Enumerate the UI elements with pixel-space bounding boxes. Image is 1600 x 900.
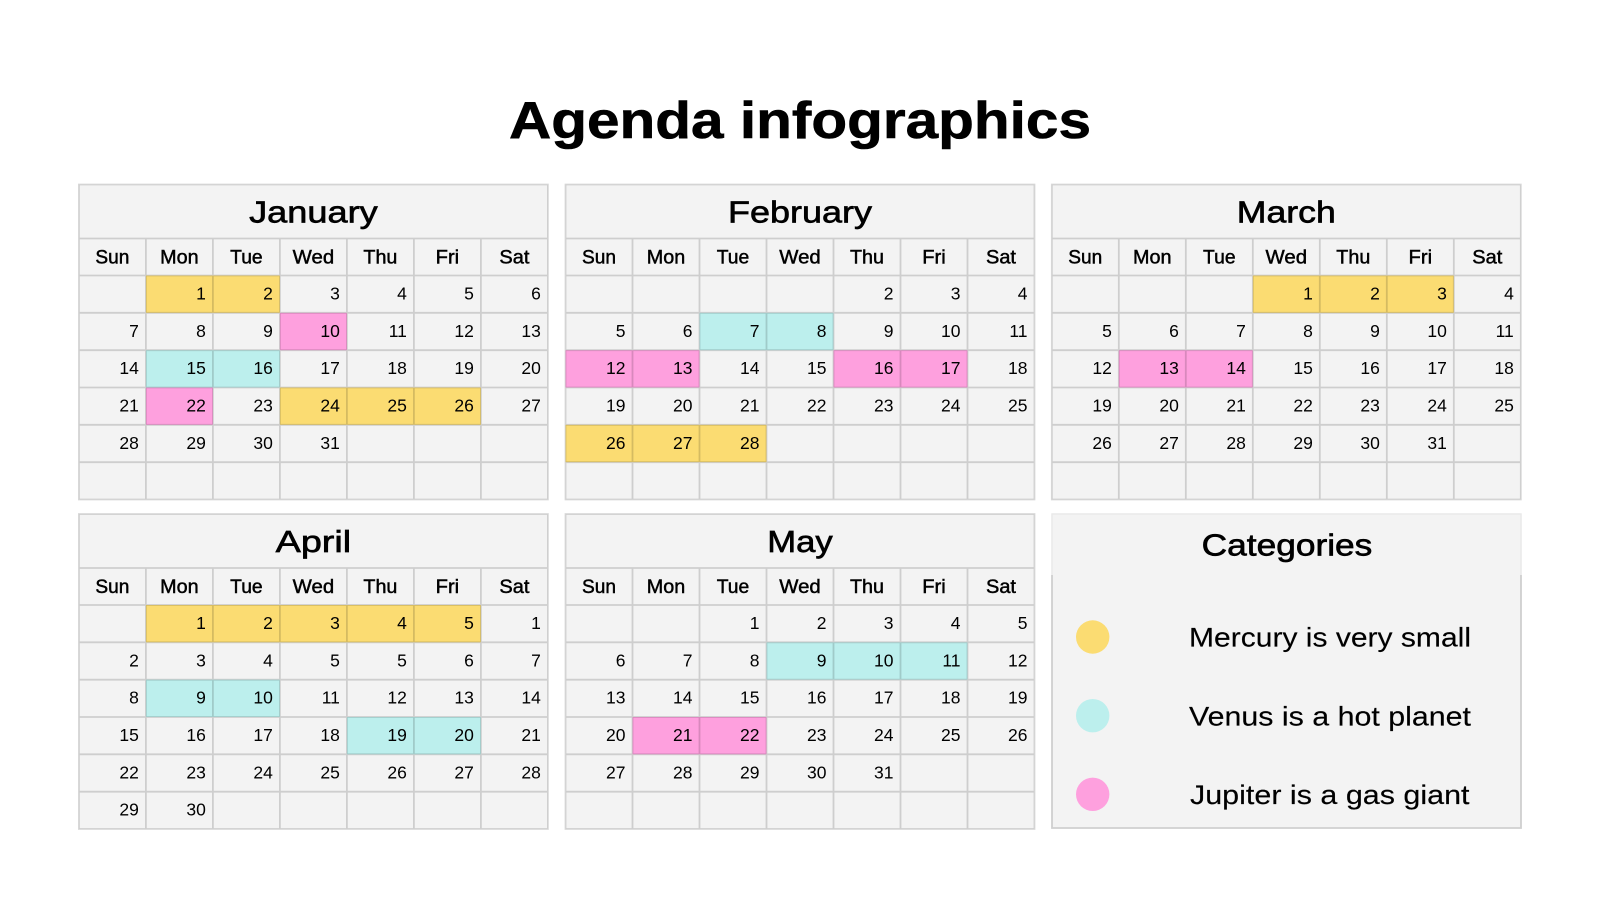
dates: 7 <box>1236 321 1246 341</box>
weekday headers: Sat <box>499 248 530 268</box>
dates: 8 <box>196 321 206 341</box>
weekday headers <box>95 577 530 598</box>
dates: 1 <box>750 613 760 633</box>
dates: 6 <box>464 650 474 670</box>
dates: 9 <box>1370 321 1380 341</box>
dates: 4 <box>1018 284 1028 304</box>
weekday headers: Tue <box>717 577 749 598</box>
dates: 25 <box>320 762 340 782</box>
dates: 5 <box>397 650 407 670</box>
dates: 6 <box>616 650 626 670</box>
weekday headers <box>582 577 1017 598</box>
dates: 19 <box>387 725 407 745</box>
month heading: January: January <box>249 194 378 230</box>
dates: 13 <box>673 358 692 378</box>
dates: 22 <box>119 762 139 782</box>
dates: 15 <box>119 725 139 745</box>
dates: 23 <box>186 762 206 782</box>
legend item: pink <box>1076 778 1470 811</box>
panel: April calendar <box>79 514 548 829</box>
dates: 19 <box>454 358 474 378</box>
dates: 19 <box>1008 688 1028 708</box>
dates: 6 <box>1169 321 1179 341</box>
dates: 4 <box>397 613 407 633</box>
weekday headers: Fri <box>922 577 946 598</box>
dates: 5 <box>616 321 626 341</box>
dates: 4 <box>397 284 407 304</box>
dates: 11 <box>1009 321 1028 341</box>
dates: 26 <box>454 396 474 416</box>
weekday headers: Thu <box>363 577 397 598</box>
dates: 7 <box>750 321 760 341</box>
weekday headers: Sun <box>582 248 616 268</box>
dates: 16 <box>1360 358 1380 378</box>
dates: 10 <box>320 321 340 341</box>
dates: 3 <box>884 613 894 633</box>
dates: 3 <box>196 650 206 670</box>
dates: 24 <box>253 762 273 782</box>
dates: 26 <box>606 433 626 453</box>
dates: 16 <box>186 725 206 745</box>
dates: 15 <box>1293 358 1313 378</box>
weekday headers: Fri <box>436 577 459 598</box>
dates: 13 <box>1159 358 1179 378</box>
weekday headers: Sat <box>986 248 1017 268</box>
dates: 27 <box>521 396 541 416</box>
dates: 20 <box>521 358 541 378</box>
legend item: cyan: Venus is a hot planet <box>1189 701 1472 731</box>
dates: 4 <box>263 650 273 670</box>
dates: 21 <box>740 396 760 416</box>
month heading: April: April <box>276 524 351 559</box>
dates: 12 <box>1008 650 1028 670</box>
dates: 8 <box>750 650 760 670</box>
weekday headers: Mon <box>160 577 199 598</box>
dates: 11 <box>322 688 340 708</box>
dates: 23 <box>807 725 826 745</box>
weekday headers: Fri <box>436 248 459 268</box>
dates: 3 <box>951 284 960 304</box>
month heading: February: February <box>728 194 873 230</box>
legend item: cyan <box>1076 699 1472 732</box>
dates: 28 <box>740 433 760 453</box>
dates: 15 <box>186 358 206 378</box>
dates: 2 <box>129 650 139 670</box>
dates: 8 <box>129 688 139 708</box>
dates: 25 <box>387 396 407 416</box>
dates: 1 <box>1303 284 1313 304</box>
dates: 7 <box>531 650 541 670</box>
dates: 13 <box>454 688 474 708</box>
panel: February calendar <box>566 184 1034 500</box>
panel: January calendar <box>79 184 548 500</box>
dates: 26 <box>1092 433 1112 453</box>
dates: 11 <box>1496 321 1514 341</box>
dates: 27 <box>673 433 692 453</box>
weekday headers: Wed <box>779 577 821 598</box>
legend item: yellow <box>1076 620 1471 654</box>
dates: 22 <box>807 396 826 416</box>
dates: 31 <box>320 433 340 453</box>
legend item: pink: Jupiter is a gas giant <box>1190 780 1470 810</box>
dates <box>1092 284 1514 453</box>
dates: 17 <box>941 358 960 378</box>
dates: 20 <box>673 396 693 416</box>
weekday headers: Thu <box>363 248 397 268</box>
dates: 15 <box>740 688 760 708</box>
weekday headers: Tue <box>230 248 263 268</box>
legend heading: Categories <box>1202 528 1372 563</box>
weekday headers: Mon <box>647 248 685 268</box>
panel: categories legend <box>1052 514 1521 828</box>
dates: 1 <box>196 613 206 633</box>
weekday headers: Thu <box>1336 248 1370 268</box>
weekday headers: Fri <box>1409 248 1432 268</box>
weekday headers: Sun <box>582 577 616 598</box>
dates: 18 <box>387 358 407 378</box>
dates: 2 <box>263 284 273 304</box>
dates: 16 <box>253 358 273 378</box>
dates: 14 <box>740 358 760 378</box>
dates: 5 <box>464 613 474 633</box>
weekday headers <box>95 248 530 268</box>
dates: 23 <box>1360 396 1380 416</box>
dates: 31 <box>874 762 894 782</box>
dates: 25 <box>1008 396 1028 416</box>
dates: 2 <box>263 613 273 633</box>
dates: 25 <box>941 725 960 745</box>
dates: 8 <box>1303 321 1313 341</box>
dates: 10 <box>941 321 961 341</box>
dates: 28 <box>119 433 139 453</box>
dates: 30 <box>253 433 273 453</box>
dates: 17 <box>1427 358 1447 378</box>
panel: March calendar <box>1052 184 1521 500</box>
dates: 22 <box>1293 396 1313 416</box>
dates: 9 <box>263 321 273 341</box>
dates: 7 <box>683 650 692 670</box>
weekday headers: Mon <box>1133 248 1172 268</box>
dates: 21 <box>119 396 139 416</box>
weekday headers: Mon <box>647 577 685 598</box>
dates: 5 <box>1018 613 1028 633</box>
weekday headers: Tue <box>1203 248 1236 268</box>
dates: 10 <box>1427 321 1447 341</box>
dates: 14 <box>673 688 693 708</box>
dates: 21 <box>673 725 692 745</box>
dates: 18 <box>1008 358 1028 378</box>
weekday headers: Tue <box>230 577 263 598</box>
dates: 31 <box>1427 433 1447 453</box>
weekday headers: Sat <box>1472 248 1503 268</box>
dates: 24 <box>874 725 894 745</box>
dates: 24 <box>320 396 340 416</box>
dates: 27 <box>606 762 626 782</box>
dates: 29 <box>119 800 139 820</box>
dates: 3 <box>330 613 340 633</box>
weekday headers <box>582 248 1017 268</box>
panel: May calendar <box>566 514 1034 829</box>
dates: 26 <box>1008 725 1028 745</box>
dates: 13 <box>606 688 626 708</box>
dates: 16 <box>874 358 894 378</box>
dates: 17 <box>874 688 894 708</box>
dates: 10 <box>874 650 894 670</box>
dates: 12 <box>454 321 474 341</box>
title: Agenda infographics <box>509 92 1091 150</box>
weekday headers: Fri <box>922 248 946 268</box>
dates: 8 <box>817 321 826 341</box>
weekday headers: Sun <box>95 577 129 598</box>
dates: 12 <box>1092 358 1112 378</box>
dates: 28 <box>673 762 692 782</box>
dates: 29 <box>1293 433 1313 453</box>
dates: 1 <box>531 613 541 633</box>
weekday headers: Sun <box>1068 248 1102 268</box>
dates: 30 <box>807 762 827 782</box>
dates: 14 <box>521 688 541 708</box>
dates: 2 <box>817 613 826 633</box>
dates: 3 <box>1437 284 1447 304</box>
dates: 17 <box>320 358 340 378</box>
dates: 5 <box>330 650 340 670</box>
weekday headers <box>1068 248 1503 268</box>
dates: 14 <box>1226 358 1246 378</box>
weekday headers: Thu <box>850 248 884 268</box>
dates: 11 <box>389 321 407 341</box>
dates: 30 <box>186 800 206 820</box>
dates: 23 <box>253 396 273 416</box>
dates: 3 <box>330 284 340 304</box>
dates: 16 <box>807 688 826 708</box>
dates: 18 <box>320 725 340 745</box>
month heading: May: May <box>767 524 833 559</box>
dates: 19 <box>606 396 626 416</box>
dates: 18 <box>941 688 960 708</box>
dates: 22 <box>186 396 206 416</box>
dates: 15 <box>807 358 826 378</box>
dates: 26 <box>387 762 407 782</box>
dates: 30 <box>1360 433 1380 453</box>
dates: 28 <box>1226 433 1246 453</box>
dates: 6 <box>683 321 692 341</box>
dates: 9 <box>817 650 826 670</box>
weekday headers: Sun <box>95 248 129 268</box>
dates <box>606 284 1028 453</box>
dates: 4 <box>1504 284 1514 304</box>
dates: 25 <box>1494 396 1514 416</box>
dates: 27 <box>1159 433 1179 453</box>
dates: 5 <box>1102 321 1112 341</box>
dates: 10 <box>253 688 273 708</box>
dates: 20 <box>454 725 474 745</box>
dates: 24 <box>941 396 961 416</box>
weekday headers: Wed <box>779 248 821 268</box>
dates <box>606 613 1028 782</box>
dates: 12 <box>606 358 626 378</box>
dates: 2 <box>884 284 894 304</box>
dates: 29 <box>186 433 206 453</box>
dates: 9 <box>884 321 894 341</box>
dates: 13 <box>521 321 541 341</box>
dates: 11 <box>942 650 960 670</box>
dates: 24 <box>1427 396 1447 416</box>
weekday headers: Wed <box>293 248 334 268</box>
dates <box>119 284 541 453</box>
dates: 29 <box>740 762 760 782</box>
dates: 12 <box>387 688 407 708</box>
dates: 6 <box>531 284 541 304</box>
weekday headers: Sat <box>499 577 530 598</box>
dates: 18 <box>1494 358 1514 378</box>
dates: 4 <box>951 613 961 633</box>
dates: 5 <box>464 284 474 304</box>
weekday headers: Sat <box>986 577 1017 598</box>
dates: 28 <box>521 762 541 782</box>
dates: 7 <box>129 321 139 341</box>
weekday headers: Wed <box>1266 248 1307 268</box>
weekday headers: Thu <box>850 577 884 598</box>
dates: 22 <box>740 725 760 745</box>
dates: 1 <box>196 284 206 304</box>
dates: 21 <box>521 725 541 745</box>
legend item: yellow: Mercury is very small <box>1189 623 1471 653</box>
weekday headers: Mon <box>160 248 199 268</box>
dates: 14 <box>119 358 139 378</box>
weekday headers: Wed <box>293 577 334 598</box>
dates: 2 <box>1370 284 1380 304</box>
dates: 23 <box>874 396 894 416</box>
dates: 19 <box>1092 396 1112 416</box>
dates: 17 <box>253 725 273 745</box>
dates: 27 <box>454 762 474 782</box>
dates: 9 <box>196 688 206 708</box>
dates <box>119 613 541 820</box>
dates: 20 <box>1159 396 1179 416</box>
dates: 20 <box>606 725 626 745</box>
weekday headers: Tue <box>717 248 749 268</box>
dates: 21 <box>1226 396 1246 416</box>
month heading: March: March <box>1237 194 1336 230</box>
